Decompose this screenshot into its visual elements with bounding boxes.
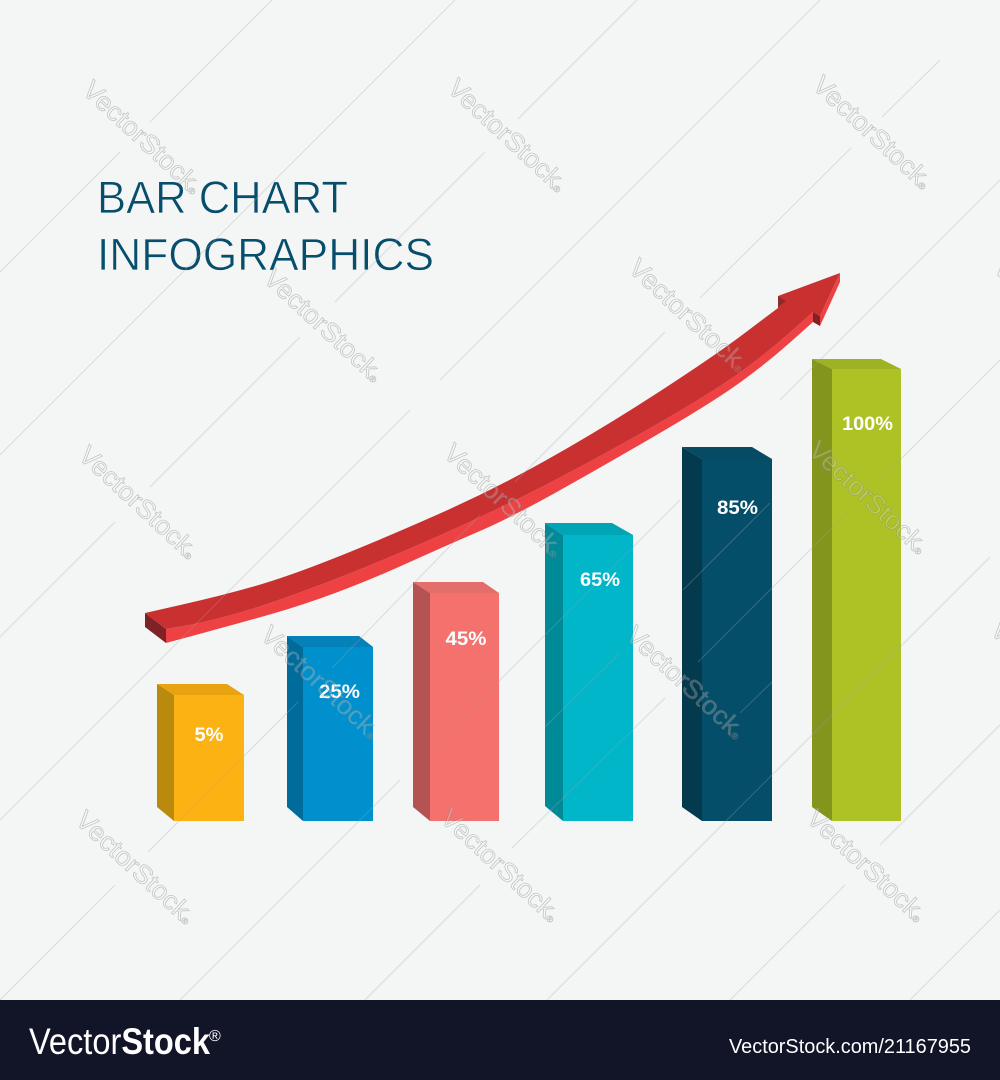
watermarks: VectorStock® [801, 802, 933, 928]
bar: 25% blue [287, 636, 373, 821]
watermarks: VectorStock® [803, 434, 935, 560]
registered mark: ® [209, 1028, 221, 1045]
watermarks: VectorStock® [73, 439, 205, 565]
watermarks: VectorStock® [435, 802, 567, 928]
footer bar [0, 1000, 1000, 1080]
watermarks: VectorStock® [258, 262, 390, 388]
footer logo: VectorStock [29, 1021, 210, 1062]
title: BAR CHART [97, 172, 348, 223]
bar: 65% teal: 65% [580, 570, 620, 591]
bar: 85% navy [682, 447, 772, 821]
bar: 25% blue: 25% [319, 682, 360, 703]
bar: 85% navy: 85% [717, 498, 758, 519]
bar: 65% teal [545, 523, 633, 821]
watermarks: VectorStock® [442, 72, 574, 198]
footer image id: VectorStock.com/21167955 [729, 1036, 971, 1058]
arrow tail end [145, 613, 166, 643]
bar: 45% salmon: 45% [446, 629, 487, 650]
watermarks: VectorStock® [438, 437, 570, 563]
watermarks [70, 69, 1000, 930]
watermarks: VectorStock® [807, 69, 939, 195]
bar chart [157, 359, 901, 821]
watermarks: VectorStock® [77, 74, 209, 200]
watermarks: VectorStock® [623, 252, 755, 378]
watermarks: VectorStock® [620, 619, 752, 745]
bar: 5% yellow: 5% [194, 725, 224, 746]
arrow top face [145, 273, 840, 629]
watermarks: VectorStock® [255, 619, 387, 745]
bar: 100% green [812, 359, 901, 821]
arrow underside [166, 312, 813, 643]
bar: 5% yellow [157, 684, 244, 821]
watermarks: VectorStock® [70, 804, 202, 930]
growth arrow [145, 273, 840, 643]
title [97, 172, 434, 280]
arrowhead side [820, 273, 840, 326]
bar: 100% green: 100% [842, 414, 893, 435]
title: INFOGRAPHICS [97, 229, 434, 280]
bar: 45% salmon [413, 582, 499, 821]
arrowhead back notch [778, 296, 786, 307]
arrowhead notch [813, 312, 820, 326]
